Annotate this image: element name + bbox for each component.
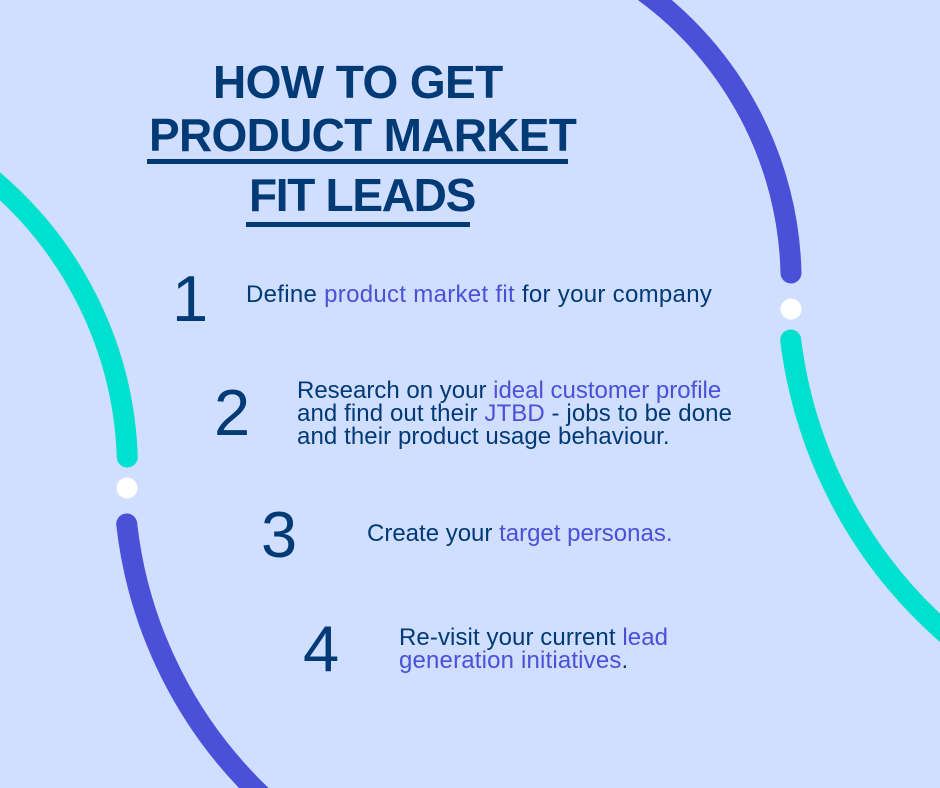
- dot: right white: [780, 298, 802, 320]
- step 3 text: Create your target personas.: [367, 520, 672, 547]
- number 1: 1: [172, 262, 208, 335]
- title line 3: FIT LEADS: [249, 169, 475, 221]
- number 3: 3: [261, 498, 297, 571]
- step 2 text: Research on your ideal customer profile: [297, 377, 721, 404]
- step 2: [214, 376, 732, 450]
- title line 1: HOW TO GET: [213, 56, 503, 108]
- step 4 text: [399, 624, 668, 674]
- arc: left teal: [0, 176, 127, 457]
- title: [147, 56, 576, 227]
- underline 2: [246, 222, 470, 227]
- title line 2: PRODUCT MARKET: [149, 109, 576, 161]
- step 2 text: and find out their JTBD - jobs to be done: [297, 400, 732, 427]
- step 1 text: Define product market fit for your company: [246, 281, 712, 308]
- arc: left blue: [127, 524, 265, 788]
- arc: right teal: [791, 340, 940, 638]
- dot: left white: [116, 478, 138, 498]
- step 2 text: and their product usage behaviour.: [297, 423, 670, 450]
- step 3: [261, 498, 672, 571]
- step 1: [172, 262, 712, 335]
- step 4: [303, 612, 668, 685]
- step 4 text: generation initiatives.: [399, 647, 628, 674]
- number 2: 2: [214, 376, 250, 449]
- step 2 text: [297, 377, 732, 450]
- number 4: 4: [303, 612, 339, 685]
- arc: right blue: [642, 0, 791, 273]
- underline 1: [147, 159, 568, 164]
- step 4 text: Re-visit your current lead: [399, 624, 668, 651]
